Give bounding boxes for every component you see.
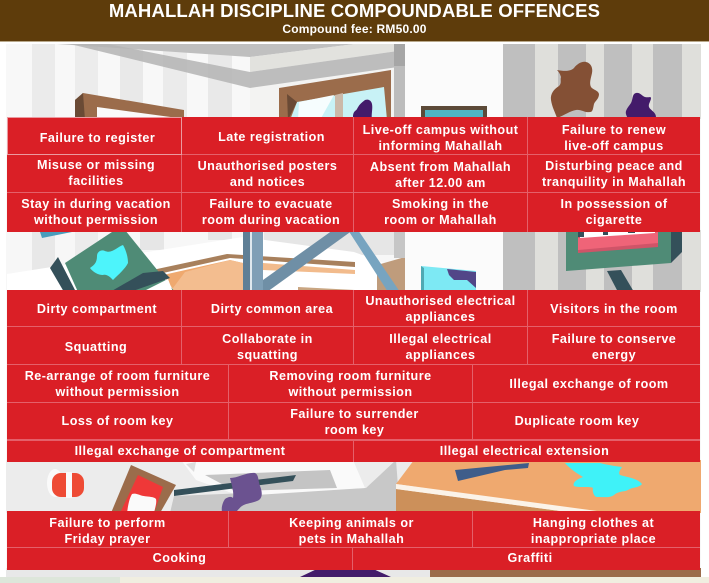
cell — [354, 155, 528, 193]
cell — [354, 440, 700, 462]
cell: Illegal exchange of room — [509, 376, 669, 390]
cell: Failure to surrender — [290, 406, 419, 420]
cell: Dirty common area — [211, 302, 333, 316]
cell: Dirty compartment — [37, 302, 157, 316]
cell — [7, 440, 354, 462]
cell: without permission — [34, 213, 158, 227]
cell: pets in Mahallah — [299, 532, 404, 546]
cell: facilities — [68, 174, 124, 188]
header banner — [0, 0, 709, 42]
cell: Graffiti — [507, 551, 553, 565]
cell: Unauthorised posters — [198, 158, 337, 172]
cell: squatting — [237, 348, 298, 362]
panel: offences table 1 — [7, 117, 700, 232]
cell: Loss of room key — [62, 414, 173, 428]
icon: overturned stool — [243, 230, 400, 292]
cell: Absent from Mahallah — [370, 160, 511, 174]
cell — [182, 155, 354, 193]
cell: without permission — [288, 384, 413, 398]
cell: informing Mahallah — [378, 139, 503, 153]
cell: live-off campus — [564, 138, 664, 152]
cell — [7, 403, 229, 440]
cell — [354, 327, 528, 365]
cell: Re-arrange of room furniture — [25, 368, 210, 382]
cell — [182, 327, 354, 365]
cell: Failure to conserve — [552, 332, 676, 346]
cell: Failure to register — [40, 130, 155, 144]
cell — [473, 511, 700, 548]
cell: Late registration — [218, 130, 325, 144]
cell — [560, 197, 668, 227]
cell — [528, 117, 700, 155]
cell: appliances — [406, 348, 475, 362]
cell: tranquility in Mahallah — [542, 175, 686, 189]
cell: Failure to renew — [562, 122, 666, 136]
middle band room scene — [6, 230, 701, 292]
cell: Misuse or missing — [37, 158, 155, 172]
cell: without permission — [55, 384, 180, 398]
icon: green sign with red mouth — [566, 230, 682, 292]
panel: offences table 3 — [7, 511, 700, 570]
cell: Illegal electrical — [389, 332, 492, 346]
cell — [7, 327, 182, 365]
cell: appliances — [406, 310, 475, 324]
subtitle: compound fee: Compound fee: RM50.00 — [282, 22, 427, 36]
cell — [528, 327, 700, 365]
cell: Illegal electrical extension — [440, 444, 609, 458]
cell: Hanging clothes at — [533, 516, 654, 530]
panel: offences table 2 — [7, 290, 700, 462]
cell: Visitors in the room — [550, 302, 678, 316]
icon: fallen red picture frame — [111, 465, 176, 513]
cell — [354, 290, 528, 327]
icon: pole with purple stain — [174, 473, 296, 512]
cell: Unauthorised electrical — [365, 294, 516, 308]
cell: and notices — [230, 174, 305, 188]
lower band floor scene — [6, 460, 701, 513]
cell — [7, 117, 182, 155]
icon: tipped cup — [47, 469, 84, 498]
cell — [528, 290, 700, 327]
cell: Squatting — [65, 340, 127, 354]
cell: Smoking in the — [392, 197, 489, 211]
cell — [354, 193, 528, 232]
cell: Failure to evacuate — [209, 196, 333, 210]
cell — [229, 365, 473, 403]
cell — [473, 403, 700, 440]
cell: Removing room furniture — [269, 368, 432, 382]
cell: Collaborate in — [222, 332, 313, 346]
cell — [182, 193, 354, 232]
right wall stripes — [405, 44, 701, 119]
cell: room or Mahallah — [384, 213, 497, 227]
cell: Failure to perform — [49, 516, 166, 530]
cell: Friday prayer — [64, 532, 151, 546]
cell: Illegal exchange of compartment — [75, 444, 285, 458]
cell — [7, 290, 182, 327]
cell: Keeping animals or — [289, 516, 414, 530]
icon: purple stain — [626, 93, 656, 120]
cell: room key — [325, 422, 384, 436]
cell — [473, 365, 700, 403]
cell — [182, 290, 354, 327]
bottom strip — [0, 568, 709, 583]
title: MAHALLAH DISCIPLINE COMPOUNDABLE OFFENCES — [109, 0, 600, 21]
icon: orange table with cyan spill — [396, 460, 701, 513]
icon: brown stain — [551, 62, 599, 118]
cell: after 12.00 am — [395, 176, 486, 190]
cell — [7, 511, 229, 548]
icon: cyan frame with purple stain — [421, 266, 476, 292]
cell — [182, 117, 354, 155]
cell — [354, 117, 528, 155]
cell — [229, 511, 473, 548]
cell: Duplicate room key — [515, 414, 639, 428]
icon: green sign with cyan splash — [50, 230, 175, 292]
icon: picture frame upper left — [75, 93, 184, 120]
cell — [528, 155, 700, 193]
cell — [7, 548, 353, 570]
cell — [7, 193, 182, 232]
cell: Disturbing peace and — [545, 159, 683, 173]
window — [279, 70, 391, 120]
cell: cigarette — [586, 213, 642, 227]
cell — [7, 155, 182, 193]
cell: Cooking — [153, 551, 206, 565]
cell: room during vacation — [202, 212, 340, 226]
cell — [229, 403, 473, 440]
cell: Stay in during vacation — [21, 197, 171, 211]
cell: In possession of — [560, 197, 668, 211]
cell: inappropriate place — [531, 532, 656, 546]
cell — [7, 365, 229, 403]
icon: teal frame — [421, 106, 487, 120]
cell: Live-off campus without — [363, 123, 518, 137]
cell: energy — [592, 348, 636, 362]
